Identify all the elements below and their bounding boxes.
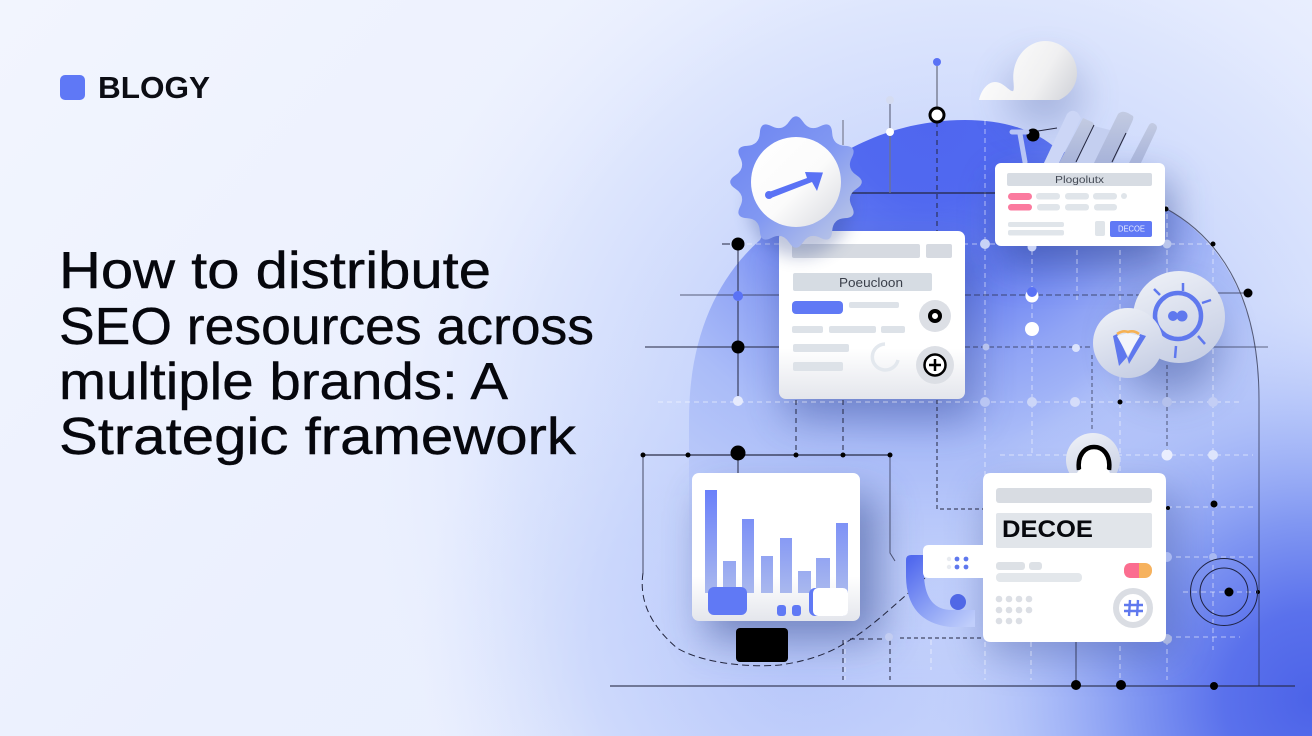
card: middle left panel [779,231,965,399]
blue arch backdrop [689,120,1258,528]
soft shadow under badge [748,153,852,257]
card: middle left panel: Poeucloon [839,275,903,290]
dot matrix [996,596,1032,624]
icon: concentric target [1190,558,1258,626]
icon: magnet shape [906,555,975,627]
card: DECOE panel: DECOE [1002,516,1093,543]
tab with dots [923,545,983,578]
card: top right panel: Plogolutx [1055,175,1104,186]
soft shadows behind cards [705,63,1220,655]
black rounded block [736,628,788,662]
icon: target circle [1133,271,1225,363]
ring icon above card [1066,433,1120,487]
icon: cloud [979,41,1077,100]
icon: tilted stripes behind card [1012,111,1157,165]
dashed curve under bar chart [642,573,925,666]
network lines: dark solid and dashed [610,66,1295,686]
network grid: dashed white lines [658,120,1257,680]
title: How to distribute [59,242,491,300]
title: multiple brands: A [59,353,508,411]
title [59,242,594,466]
badge with arrow [730,116,862,248]
card: DECOE panel [983,468,1166,642]
card: bar chart [692,473,860,621]
card: top right panel: DECOE [1118,224,1145,234]
title: SEO resources across [59,298,594,356]
bars [705,490,848,593]
card: top right panel [995,163,1165,246]
network nodes [640,58,1260,690]
icon: shield circle [1093,308,1163,378]
logo: BLOGY: BLOGY [98,70,210,105]
title: Strategic framework [59,408,577,466]
icon: arrow [765,172,823,199]
